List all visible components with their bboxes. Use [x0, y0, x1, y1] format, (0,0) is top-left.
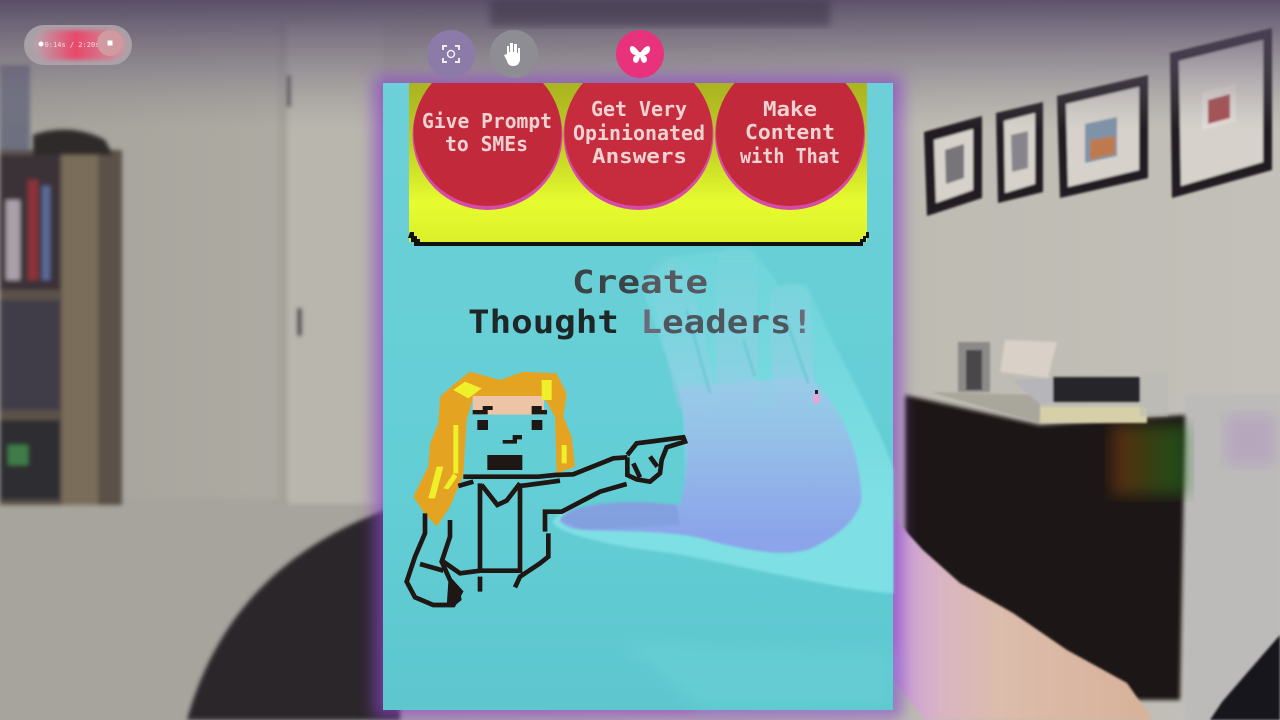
bed — [0, 498, 400, 720]
icon: butterfly button — [616, 30, 664, 78]
hair — [413, 372, 575, 527]
red circle 2: Answers — [592, 144, 687, 168]
icon: hand button — [490, 30, 538, 78]
heading: Cre ate — [572, 263, 708, 301]
lower wrist tint — [620, 640, 893, 710]
door — [278, 20, 383, 504]
dresser objects — [930, 340, 1168, 423]
heading — [468, 263, 813, 341]
lower right wall — [1185, 395, 1280, 720]
light hand halo — [553, 250, 893, 593]
translucent blue hand — [560, 267, 862, 553]
dresser — [905, 395, 1185, 700]
yellow banner — [408, 83, 869, 246]
red circle 3: Make — [763, 97, 817, 121]
face — [473, 406, 547, 470]
bookshelf — [0, 65, 122, 505]
red circle 1: Give Prompt — [422, 109, 552, 133]
red circle 3: Content — [745, 120, 835, 144]
picture frames — [924, 28, 1272, 216]
red circle 2: Opinionated — [573, 121, 705, 145]
red circle 2: Get Very — [591, 97, 687, 121]
outline — [407, 437, 685, 605]
arm — [893, 517, 1153, 720]
icon: screenshot button — [427, 30, 475, 78]
forehead — [473, 396, 544, 415]
cursor marker — [813, 390, 820, 403]
red circle 3: with That — [740, 144, 840, 168]
prism reflection — [1112, 425, 1187, 495]
red circle 2 — [564, 83, 714, 210]
poster panel — [383, 58, 893, 710]
pixel character pointing — [407, 372, 685, 607]
red circle 1: to SMEs — [445, 132, 528, 156]
recording pill — [24, 25, 132, 65]
top purple fade — [0, 0, 1280, 130]
banner bottom edge — [408, 232, 869, 246]
hair highlights — [428, 380, 567, 498]
red circle 1 — [412, 83, 562, 210]
dark shoe — [1210, 635, 1280, 720]
dark shirt — [187, 505, 400, 720]
recording pill: 0:14s / 2:20s — [45, 41, 99, 49]
heading: Thought Leaders ! — [468, 303, 813, 341]
panel glow — [374, 76, 902, 718]
red circle 3 — [715, 83, 865, 210]
